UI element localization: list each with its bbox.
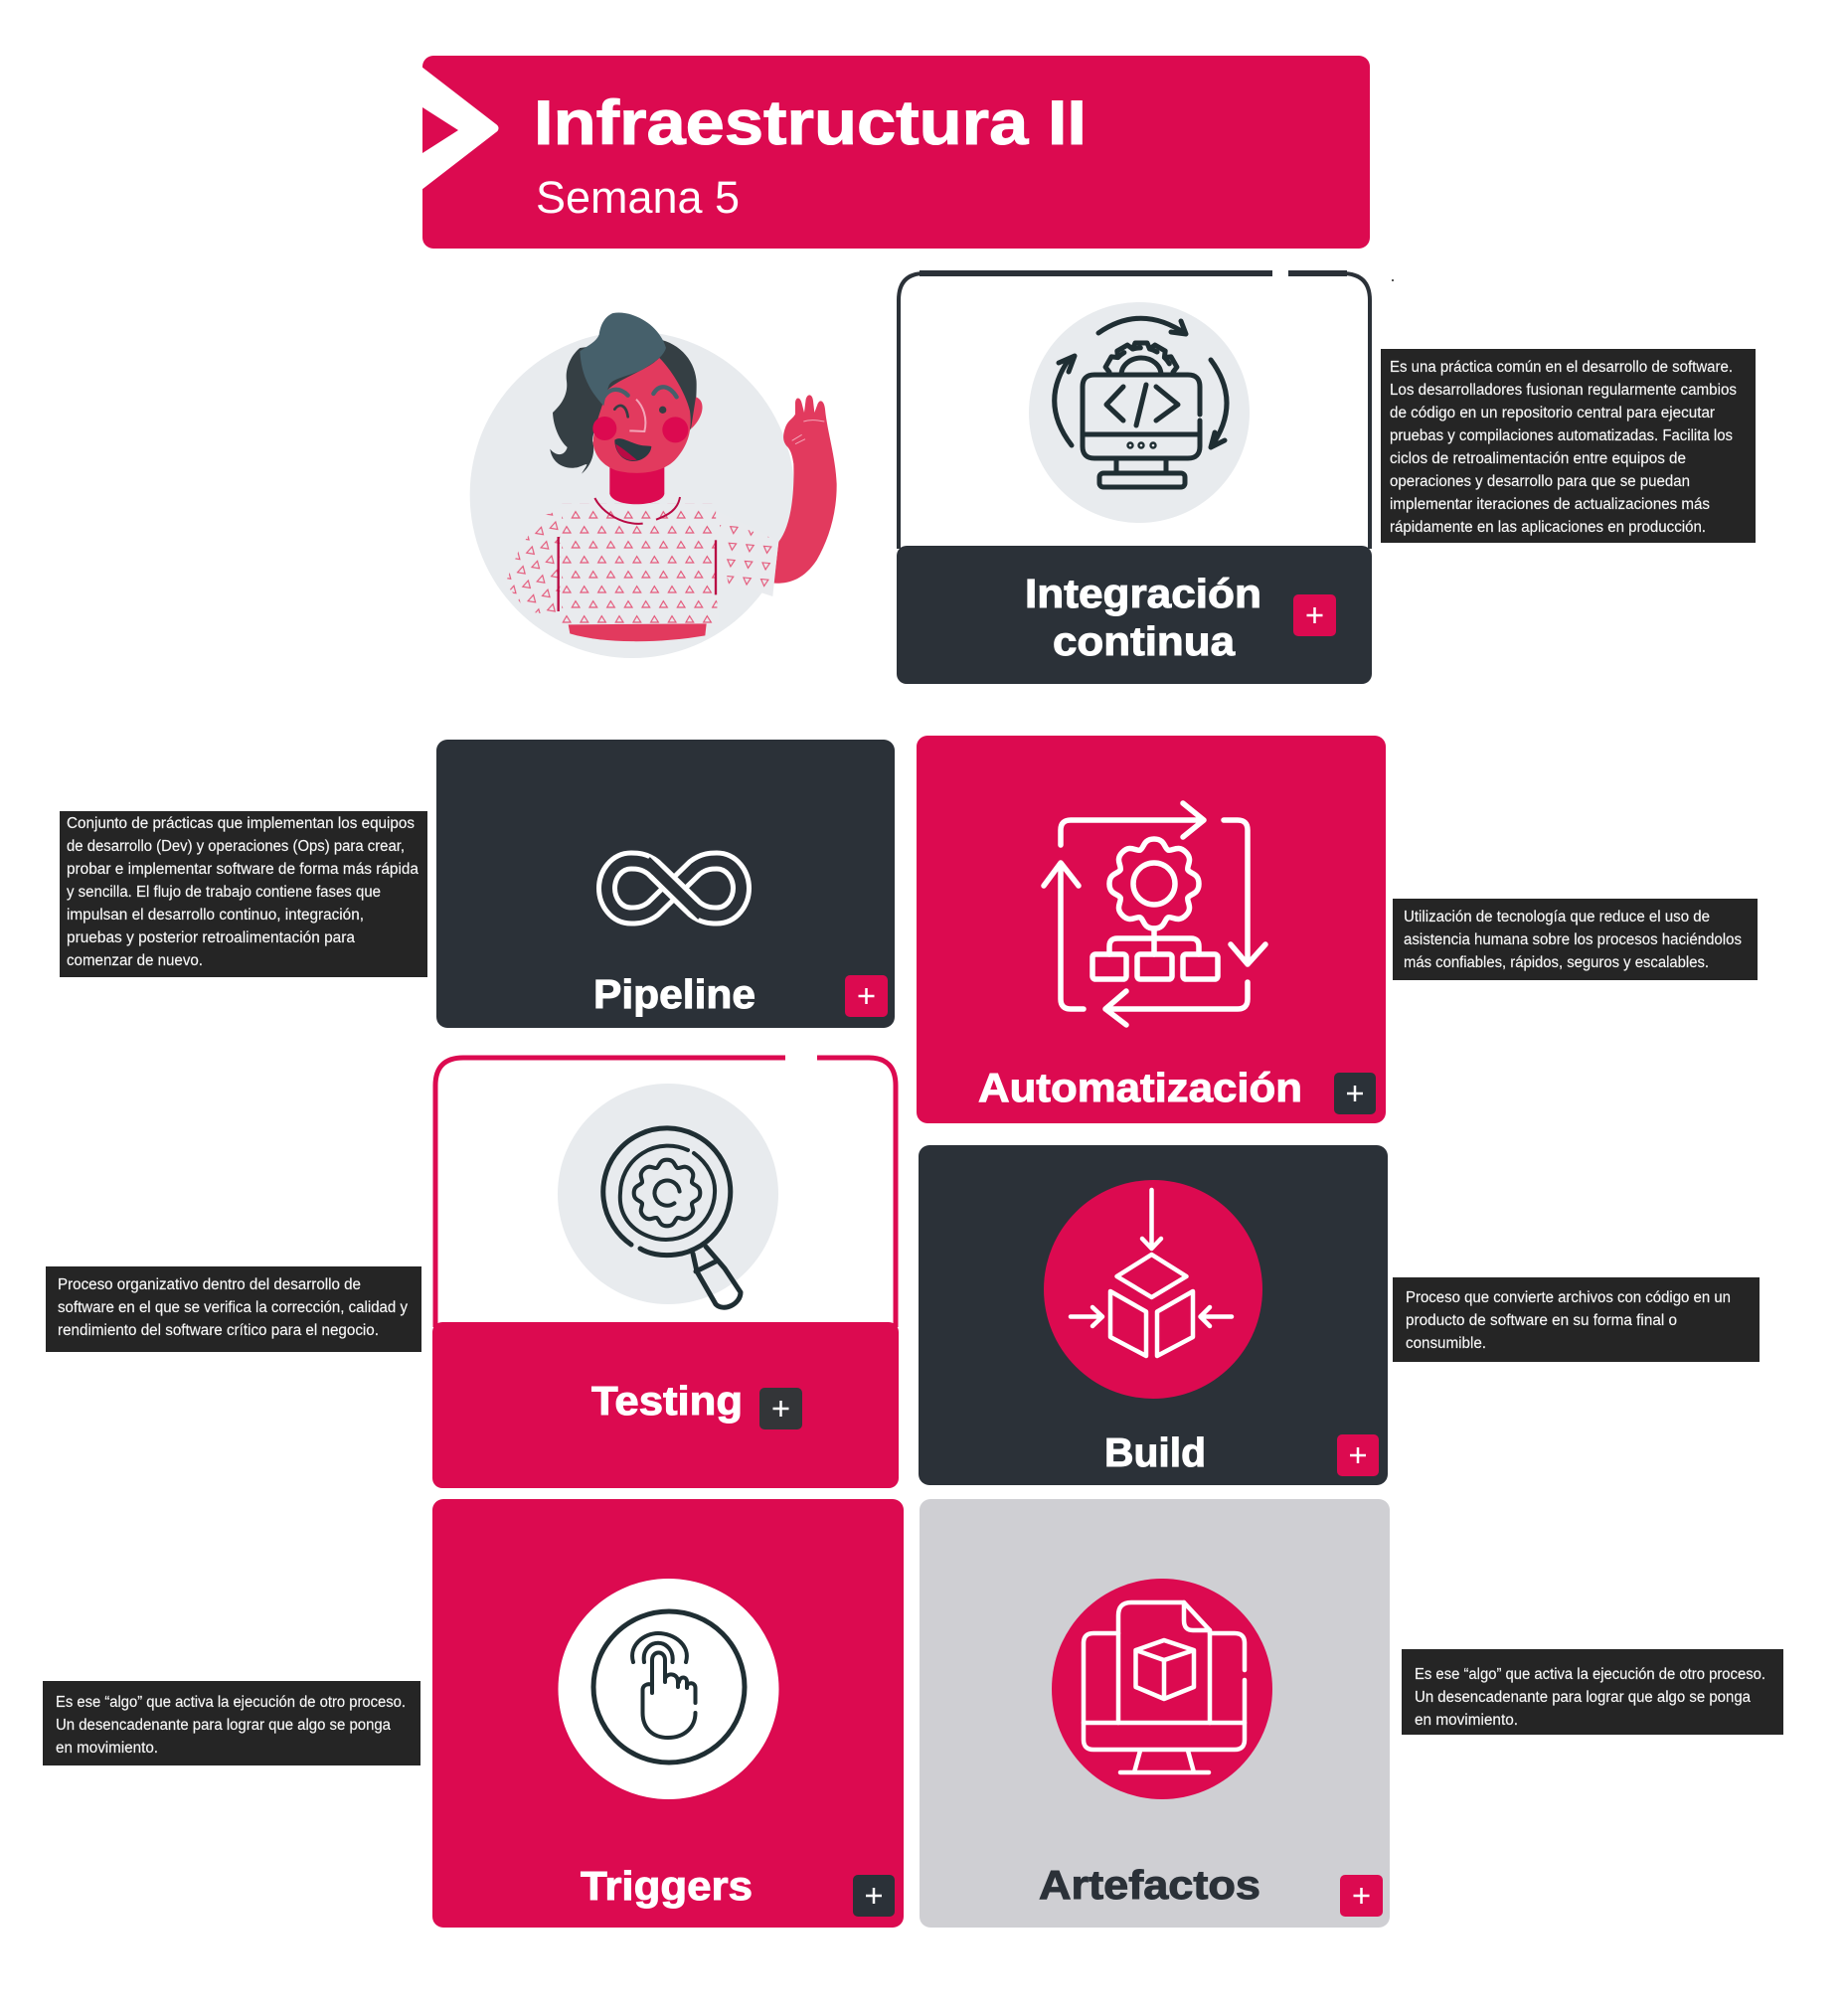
icon: artifact monitor	[1084, 1602, 1245, 1772]
facial features	[592, 387, 688, 461]
text block: Pipeline: impulsan el desarrollo continuo, integración,	[67, 907, 364, 924]
illustration: waving woman	[470, 313, 837, 658]
ear	[691, 397, 703, 429]
plus button	[1293, 594, 1336, 636]
heading: Build	[1104, 1429, 1206, 1475]
hand creases	[792, 420, 824, 444]
icon: tap hand	[593, 1611, 745, 1763]
text block: Integración continua	[1381, 349, 1756, 543]
heading: Pipeline	[593, 971, 755, 1017]
text block: Artefactos	[1402, 1649, 1783, 1735]
text block: Triggers: Es ese “algo” que activa la ejecución de otro proceso.	[56, 1694, 406, 1711]
panel: Artefactos	[920, 1499, 1390, 1928]
text block: Integración continua: implementar iteraciones de actualizaciones más	[1390, 496, 1710, 513]
text block: Testing: software en el que se verifica la corrección, calidad y	[58, 1299, 408, 1316]
text block: Integración continua: ciclos de retroalimentación entre equipos de	[1390, 450, 1686, 467]
text block: Build: producto de software en su forma final o	[1406, 1312, 1677, 1329]
panel: Build	[919, 1145, 1388, 1485]
text block: Automatización: más confiables, rápidos, seguros y escalables.	[1404, 954, 1709, 971]
text block: Triggers: en movimiento.	[56, 1740, 158, 1757]
panel: Integración continua	[897, 273, 1372, 684]
panel: Automatización	[917, 736, 1386, 1123]
icon: chevron notch	[416, 68, 494, 189]
subheading: Semana 5: Semana 5	[536, 172, 740, 223]
arm and hand	[773, 395, 837, 584]
hair back	[550, 338, 697, 474]
panel: Pipeline	[436, 740, 895, 1028]
plus button	[1337, 1434, 1379, 1476]
text block: Integración continua: pruebas y compilaciones automatizadas. Facilita los	[1390, 427, 1733, 444]
text block: Integración continua: Los desarrolladores fusionan regularmente cambios	[1390, 382, 1737, 399]
text block: Testing: rendimiento del software crítico para el negocio.	[58, 1322, 379, 1339]
icon: infinity	[606, 861, 742, 916]
heading: Artefactos	[1039, 1862, 1260, 1908]
heading	[1025, 571, 1261, 664]
sweater	[505, 497, 778, 641]
icon: magnifier with gear	[603, 1128, 741, 1307]
text block: Build: consumible.	[1406, 1335, 1486, 1352]
heading: Integración	[1025, 571, 1261, 616]
panel: Triggers	[432, 1499, 904, 1928]
heading: Infraestructura II: Infraestructura II	[534, 88, 1087, 158]
plus button	[845, 975, 888, 1017]
heading: Triggers	[581, 1863, 753, 1909]
icon: automation cycle	[1044, 803, 1265, 1025]
text block: Testing: Proceso organizativo dentro del desarrollo de	[58, 1276, 361, 1293]
neck	[609, 454, 664, 504]
text block: Automatización	[1393, 899, 1758, 980]
face	[593, 358, 691, 473]
small dot	[1392, 279, 1394, 281]
text block: Pipeline	[60, 811, 427, 977]
heading: Automatización	[978, 1065, 1302, 1110]
text block: Pipeline: de desarrollo (Dev) y operaciones (Ops) para crear,	[67, 838, 405, 855]
heading: continua	[1053, 618, 1236, 664]
heading: Testing	[591, 1378, 743, 1424]
plus button	[759, 1388, 802, 1429]
plus button	[1340, 1875, 1383, 1917]
icon: code monitor	[1055, 318, 1227, 487]
text block: Automatización: asistencia humana sobre los procesos haciéndolos	[1404, 931, 1742, 948]
plus button	[853, 1875, 895, 1917]
text block: Integración continua: de código en un repositorio central para ejecutar	[1390, 405, 1715, 421]
title banner	[416, 56, 1370, 249]
text block: Pipeline: probar e implementar software de forma más rápida	[67, 861, 419, 878]
text block: Triggers	[43, 1681, 420, 1765]
text block: Automatización: Utilización de tecnología que reduce el uso de	[1404, 909, 1710, 925]
panel: Testing	[432, 1058, 899, 1488]
icon: cube build	[1071, 1190, 1232, 1356]
text block: Testing	[46, 1266, 421, 1352]
text block: Integración continua: operaciones y desarrollo para que se puedan	[1390, 473, 1690, 490]
text block: Build: Proceso que convierte archivos con código en un	[1406, 1289, 1731, 1306]
text block: Integración continua: rápidamente en las aplicaciones en producción.	[1390, 519, 1706, 536]
text block: Artefactos: en movimiento.	[1415, 1712, 1518, 1729]
text block: Triggers: Un desencadenante para lograr que algo se ponga	[56, 1717, 391, 1734]
text block: Artefactos: Es ese “algo” que activa la ejecución de otro proceso.	[1415, 1666, 1765, 1683]
hair top	[580, 313, 666, 406]
plus button	[1334, 1073, 1376, 1114]
text block: Pipeline: pruebas y posterior retroalimentación para	[67, 929, 355, 946]
text block: Pipeline: y sencilla. El flujo de trabajo contiene fases que	[67, 884, 381, 901]
text block: Pipeline: Conjunto de prácticas que implementan los equipos	[67, 815, 415, 832]
text block: Build	[1393, 1277, 1760, 1362]
text block: Pipeline: comenzar de nuevo.	[67, 952, 203, 969]
text block: Artefactos: Un desencadenante para lograr que algo se ponga	[1415, 1689, 1751, 1706]
text block: Integración continua: Es una práctica común en el desarrollo de software.	[1390, 359, 1733, 376]
